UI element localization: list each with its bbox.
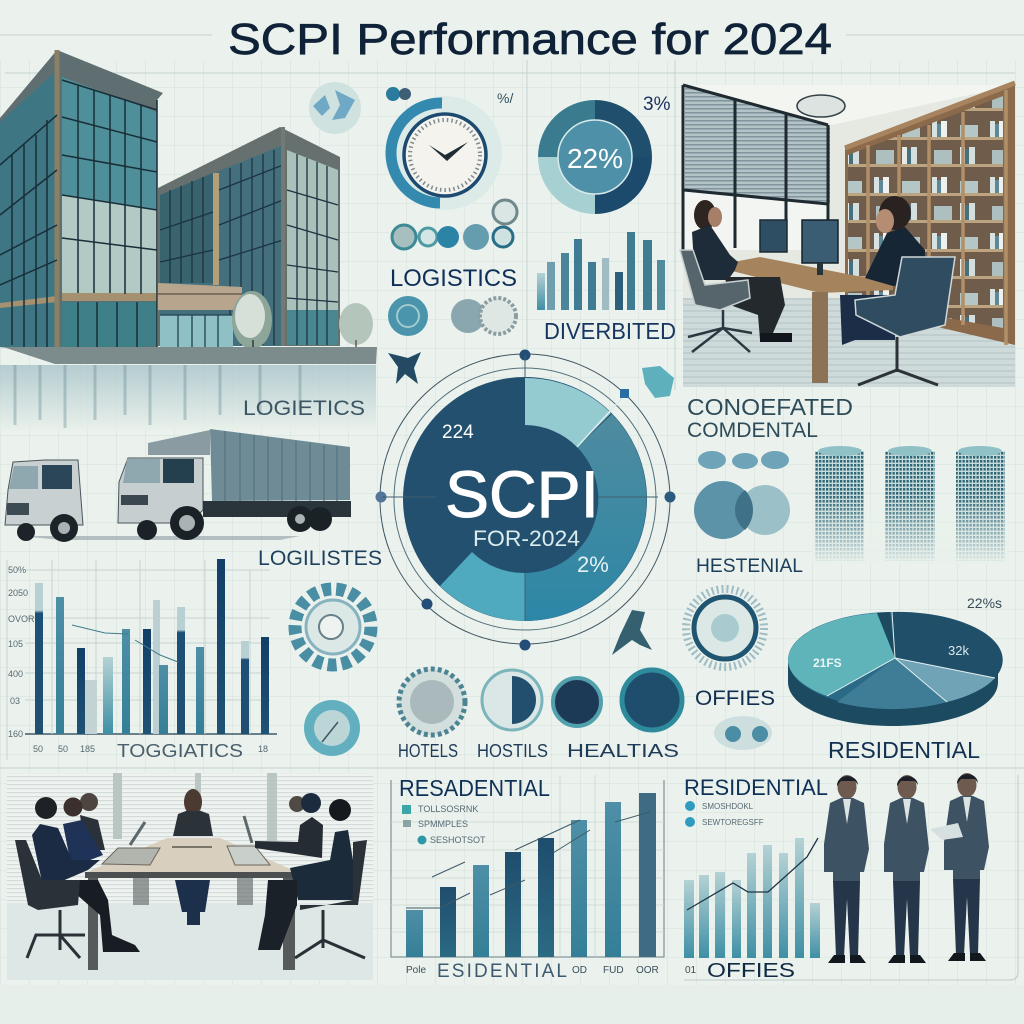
chair: left <box>15 840 85 958</box>
chart: donut 22% <box>538 94 671 214</box>
truck: small <box>5 460 83 542</box>
label: residential: RESIDENTIAL <box>828 737 980 763</box>
bars <box>684 838 820 958</box>
axis labels <box>8 565 268 754</box>
chart: top bars <box>537 232 665 310</box>
label: SCPI: SCPI <box>445 457 599 531</box>
icon: gear left <box>295 589 371 665</box>
building: lower block <box>158 127 340 347</box>
title: SCPI Performance for 2024 <box>228 15 832 64</box>
axis labels: 18 <box>258 744 268 754</box>
labels: hotels row: HOSTILS <box>477 741 548 761</box>
chart: 3D pie <box>788 595 1003 726</box>
bookcase <box>845 83 1015 345</box>
icon: aqua gem <box>642 366 674 398</box>
axis labels: OVOR <box>8 614 35 624</box>
axis labels: 185 <box>80 744 95 754</box>
building: tall tower <box>0 50 163 354</box>
chart: 3D pie: 21FS <box>813 656 842 670</box>
legend: SPMMPLES <box>418 819 468 829</box>
label: conoefated comdental <box>687 394 853 442</box>
chart: donut 22%: 22% <box>567 143 623 174</box>
label: diversified: DIVERBITED <box>544 318 676 344</box>
icon row: hotels badges <box>399 669 682 735</box>
person: left seated <box>692 200 792 342</box>
axis labels: OD <box>572 965 587 976</box>
labels: hotels row <box>398 741 679 761</box>
axis labels: OOR <box>636 965 659 976</box>
towers <box>812 446 1008 563</box>
icon row: small emblems <box>698 451 789 469</box>
panel frame <box>684 775 1018 980</box>
axis labels: 03 <box>10 696 20 706</box>
axis labels <box>406 965 659 976</box>
panel: trucks <box>5 429 351 542</box>
panel: residential bar chart <box>391 775 664 982</box>
legend <box>402 804 486 845</box>
heading: logistics: LOGISTICS <box>390 265 517 292</box>
person: right seated <box>840 196 925 345</box>
axis labels: 50 <box>58 744 68 754</box>
label: percent on donut: 2% <box>577 552 609 577</box>
icon: bird mark <box>388 352 421 384</box>
bars <box>406 793 656 957</box>
axis label: 01 <box>685 965 697 976</box>
axis labels: 400 <box>8 669 23 679</box>
axis labels: FUD <box>603 965 624 976</box>
label: logistics faded: LOGIETICS <box>243 397 365 420</box>
chart: donut 22%: 3% <box>643 94 671 115</box>
axis labels: 50 <box>33 744 43 754</box>
person: left <box>824 775 869 963</box>
truck: large <box>118 429 351 540</box>
icon: animal mark <box>612 610 652 655</box>
panel: office buildings <box>0 50 377 430</box>
label: offices: OFFIES <box>707 960 795 982</box>
ground reflection <box>0 347 377 430</box>
chair: right <box>295 840 367 958</box>
labels: hotels row: HOTELS <box>398 741 458 761</box>
legend: TOLLSOSRNK <box>418 804 478 814</box>
icon: trees <box>232 291 373 353</box>
axis labels: 105 <box>8 639 23 649</box>
label: hestenial: HESTENIAL <box>696 556 803 577</box>
legend: SESHOTSOT <box>430 835 486 845</box>
axis labels: 2050 <box>8 588 28 598</box>
heading: resadential: RESADENTIAL <box>399 775 550 801</box>
label: logistics under chart: TOGGIATICS <box>117 741 243 761</box>
label: offices: OFFIES <box>695 687 775 710</box>
panel: offices chart with people <box>684 773 1018 982</box>
label: for 2024: FOR-2024 <box>473 526 580 551</box>
label: 2024 on donut: 224 <box>442 422 474 443</box>
chart: central donut <box>376 350 676 650</box>
monitors <box>760 220 838 275</box>
legend: SMOSHDOKL <box>702 802 754 811</box>
label: logistics under truck: LOGILISTES <box>258 547 382 570</box>
axis labels: Pole <box>406 965 426 976</box>
desk <box>728 257 893 383</box>
label: conoefated comdental: CONOEFATED <box>687 394 853 420</box>
person: centre <box>173 789 213 925</box>
legend: SEWTOREGSFF <box>702 818 764 827</box>
icon row: textured discs <box>388 296 516 336</box>
floor <box>7 903 373 980</box>
trend lines <box>406 812 650 908</box>
tablet <box>930 823 963 840</box>
people: left side <box>32 793 140 952</box>
table <box>85 838 297 970</box>
axis labels: 50% <box>8 565 26 575</box>
room wall and floor <box>683 85 1015 387</box>
icon: glossy orb <box>309 82 361 134</box>
person: right <box>944 773 989 961</box>
legend <box>685 801 764 827</box>
icon: small disc <box>714 716 772 750</box>
label: conoefated comdental: COMDENTAL <box>687 419 818 442</box>
icon: clock <box>386 87 517 224</box>
window with blinds <box>683 85 830 250</box>
laptops <box>102 816 270 865</box>
chart: 3D pie: 22%s <box>967 595 1002 611</box>
icon: gear right <box>686 589 764 667</box>
chair: right <box>855 257 955 385</box>
panel: meeting room <box>7 773 373 980</box>
panel: office interior <box>680 83 1015 387</box>
chart: 3D pie: 32k <box>948 643 969 658</box>
icon: teal disc <box>304 700 360 756</box>
person: middle <box>884 775 929 963</box>
small percent mark: %/ <box>497 90 513 106</box>
window blinds <box>7 773 373 903</box>
axis labels: 160 <box>8 729 23 739</box>
icon: overlapping circles <box>694 481 790 539</box>
ceiling lamp <box>797 95 845 117</box>
people: right side <box>255 793 353 950</box>
labels: hotels row: HEALTIAS <box>567 741 679 761</box>
chair: left <box>680 250 752 352</box>
ground shadow <box>20 536 300 540</box>
chart: left bars <box>7 559 277 760</box>
heading: residential: RESIDENTIAL <box>684 775 828 800</box>
icon row: round badges <box>392 224 513 250</box>
label: esidential: ESIDENTIAL <box>437 961 567 982</box>
